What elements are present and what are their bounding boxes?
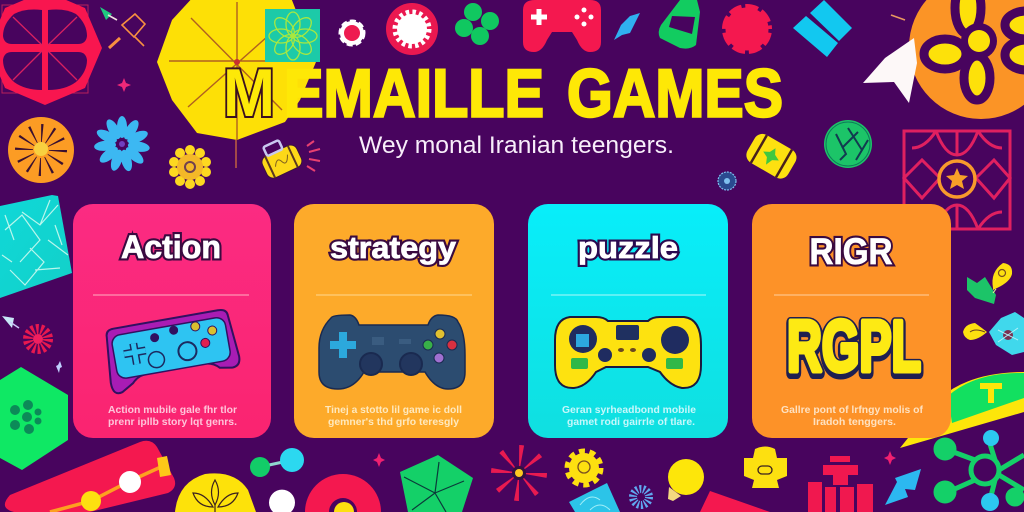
icon: orange circle with flower <box>909 0 1024 119</box>
icon: navy controller <box>319 315 465 389</box>
icon: green molecule network <box>936 430 1024 511</box>
description: action <box>108 404 237 428</box>
icon: yellow controller <box>555 317 701 388</box>
title: EMAILLE <box>284 56 544 132</box>
description: strategy: Tinej a stotto lil game ic doll <box>325 404 462 416</box>
icon: tiny lightning <box>56 361 62 373</box>
icon: yellow map pin <box>992 263 1012 293</box>
icon: cyan twin bars <box>793 0 852 57</box>
title <box>223 55 783 132</box>
icon: red pixel robot <box>808 456 873 512</box>
icon: blue feather <box>614 13 640 40</box>
icon: rgpl logo <box>787 307 921 389</box>
icon: red gear <box>722 4 772 54</box>
icon: dash <box>891 15 905 20</box>
icon: yellow gear <box>567 451 601 485</box>
icon: green medallion <box>824 120 872 168</box>
panel: puzzle <box>528 204 728 438</box>
icon: teal patterned panel <box>0 195 72 298</box>
icon: white flower with red centre <box>340 21 364 45</box>
icon: blue lightning <box>885 469 921 505</box>
icon: red circle with white burst <box>386 3 438 55</box>
icon: cyan hexagon flower <box>989 312 1024 355</box>
description: action: prenr ipllb story lqt genrs. <box>108 416 237 428</box>
heading: rigr: RIGR <box>810 231 892 272</box>
heading: strategy: strategy <box>330 230 457 265</box>
icon: yellow sunflower <box>169 145 211 189</box>
icon: red octagon ornament <box>0 0 102 105</box>
icon: green pentagon <box>400 455 473 512</box>
icon: red burst with yellow centre <box>502 456 536 490</box>
icon: yellow leaf medallion <box>175 473 256 512</box>
description: rigr: Iradoh tenggers. <box>813 416 896 428</box>
icon: red flower gear <box>305 474 381 512</box>
icon: small arrow and kite sparks <box>100 7 145 48</box>
icon: rgpl logo: RGPL <box>787 307 921 387</box>
icon: teal square with green flower <box>265 9 320 62</box>
icon: green clover <box>455 3 499 45</box>
icon: large yellow polygon wheel <box>157 0 316 168</box>
title: M <box>223 55 275 131</box>
icon: pink sparkle <box>884 451 896 465</box>
icon: red lattice square with star <box>904 131 1010 229</box>
icon: blue flower <box>94 116 150 172</box>
icon: small white arrow <box>2 316 19 328</box>
heading: action: Action <box>121 229 221 265</box>
heading: strategy: strategy <box>330 230 457 265</box>
icon: green leaf <box>967 277 996 304</box>
icon: red game controller <box>523 0 601 52</box>
icon: orange sun circle <box>8 117 74 183</box>
description: action: Action mubile gale fhr tlor <box>108 404 237 416</box>
icon: yellow drop <box>963 323 987 340</box>
icon: green and yellow dome <box>900 372 1024 448</box>
heading: action: Action <box>121 229 221 265</box>
panel: action <box>73 204 271 438</box>
icon: blue tilted tile <box>569 483 620 512</box>
icon: red burst <box>28 329 48 349</box>
icon: white rocket shape <box>863 38 917 103</box>
icon: rgpl logo: RGPL <box>787 309 921 389</box>
panel: strategy <box>294 204 494 438</box>
icon: green bottle <box>659 0 700 49</box>
icon: green cyan dumbbell <box>250 448 304 477</box>
icon: red yellow strip <box>5 441 175 512</box>
subtitle: Wey monal Iranian teengers. <box>359 132 674 159</box>
panel: rigr <box>752 204 1024 448</box>
description: puzzle: gamet rodi gairrle of tlare. <box>567 416 695 428</box>
heading: puzzle: puzzle <box>578 230 678 265</box>
icon: pink sparkle <box>373 453 385 467</box>
icon: yellow bag <box>256 135 320 180</box>
description: rigr: Gallre pont of lrfngy molis of <box>781 404 923 416</box>
heading: puzzle: puzzle <box>578 230 678 265</box>
icon: yellow football <box>743 131 800 182</box>
icon: purple tilted controller <box>102 308 242 394</box>
description: strategy: gemner's thd grfo teresgly <box>328 416 459 428</box>
icon: red tilted card <box>700 491 770 512</box>
description: rigr <box>781 404 923 428</box>
icon: white ball <box>269 490 295 512</box>
title: GAMES <box>567 56 783 132</box>
description: strategy <box>325 404 462 428</box>
icon: green hexagon <box>0 367 68 470</box>
description: puzzle <box>562 404 696 428</box>
icon: blue spark <box>633 489 649 505</box>
icon: yellow bulb <box>668 459 704 501</box>
icon: tiny blue medallion <box>718 172 736 190</box>
description: puzzle: Geran syrheadbond mobile <box>562 404 696 416</box>
icon: yellow puzzle piece <box>744 446 787 488</box>
icon: pink sparkle <box>117 78 131 92</box>
heading: rigr: RIGR <box>810 231 892 272</box>
